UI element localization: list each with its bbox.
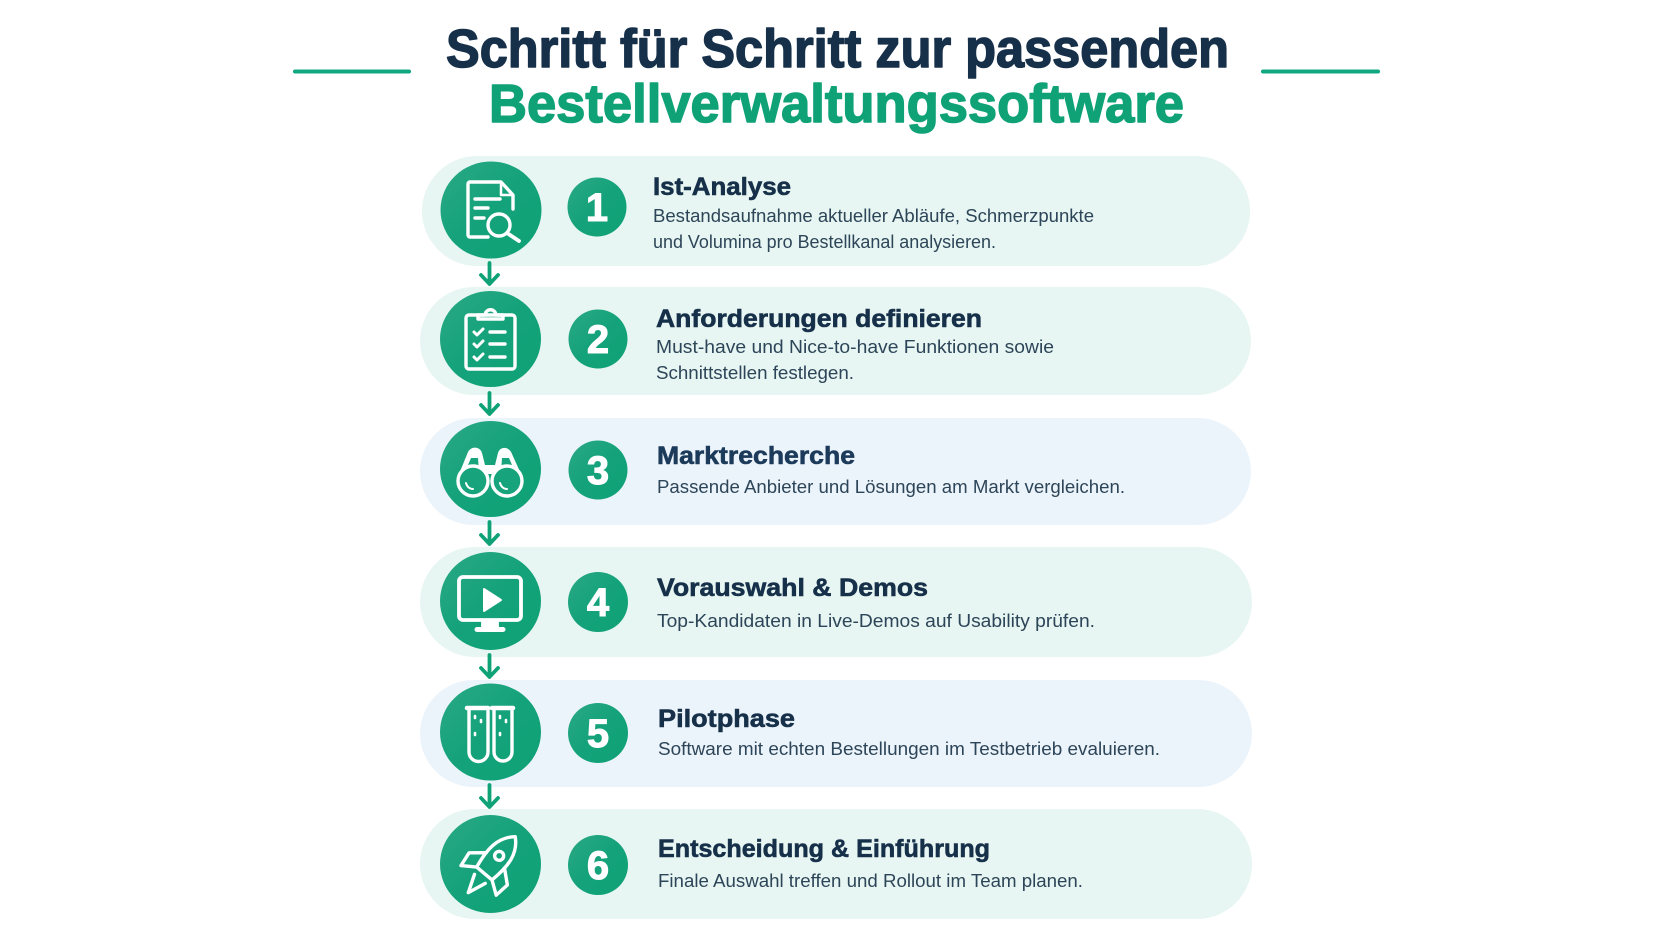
number badge 2: [568, 310, 628, 368]
step 2 description: [656, 337, 1054, 383]
step 3 description: Passende Anbieter und Lösungen am Markt vergleichen.: [657, 477, 1125, 497]
panel: step 2 background: [420, 287, 1251, 395]
step 2 heading: Anforderungen definieren: [656, 305, 982, 333]
title line 1: Schritt für Schritt zur passenden: [446, 19, 1229, 79]
step 6 description: Finale Auswahl treffen und Rollout im Team planen.: [658, 871, 1083, 891]
step 2 description: Must-have und Nice-to-have Funktionen sowie: [656, 337, 1054, 357]
panel: step 6 background: [420, 809, 1252, 919]
number badge 4: [568, 572, 628, 632]
step 5: Pilotphase: [420, 680, 1252, 787]
number badge 1: [568, 178, 626, 236]
step 5 heading: Pilotphase: [658, 705, 795, 733]
number badge 3: 3: [587, 449, 609, 493]
title: [446, 19, 1229, 134]
step 6: Entscheidung & Einführung: [420, 809, 1252, 919]
step 5 description: Software mit echten Bestellungen im Testbetrieb evaluieren.: [658, 739, 1160, 759]
step 1 description: und Volumina pro Bestellkanal analysieren.: [653, 232, 996, 252]
arrow 5 to 6: [481, 785, 498, 807]
icon: clipboard checklist: [440, 291, 541, 387]
step 1 description: Bestandsaufnahme aktueller Abläufe, Schmerzpunkte: [653, 206, 1094, 226]
arrow 3 to 4: [481, 522, 498, 544]
arrow 4 to 5: [481, 655, 498, 677]
number badge 2: 2: [587, 318, 609, 362]
icon: test tubes: [440, 684, 541, 780]
panel: step 1 background: [422, 156, 1250, 266]
number badge 6: [568, 835, 628, 895]
step 2 description: Schnittstellen festlegen.: [656, 363, 854, 383]
number badge 1: 1: [586, 186, 608, 230]
step 4 description: Top-Kandidaten in Live-Demos auf Usability prüfen.: [657, 611, 1095, 631]
icon: binoculars: [440, 421, 541, 517]
step 1: Ist-Analyse: [422, 156, 1250, 266]
title line 2: Bestellverwaltungssoftware: [489, 74, 1184, 134]
number badge 5: 5: [587, 712, 609, 756]
number badge 6: 6: [587, 844, 609, 888]
step 1 heading: Ist-Analyse: [653, 173, 791, 201]
step 1 description: [653, 206, 1094, 252]
number badge 5: [568, 703, 628, 763]
number badge 3: [568, 440, 628, 500]
panel: step 3 background: [420, 418, 1251, 525]
icon: monitor with play button: [440, 552, 541, 650]
arrow 1 to 2: [481, 263, 498, 284]
number badge 4: 4: [587, 581, 610, 625]
arrow 2 to 3: [481, 393, 498, 414]
step 4 heading: Vorauswahl & Demos: [657, 574, 928, 602]
step 4: Vorauswahl & Demos: [420, 547, 1252, 657]
step 3 heading: Marktrecherche: [657, 442, 855, 470]
panel: step 4 background: [420, 547, 1252, 657]
icon: rocket: [440, 815, 541, 913]
icon: document with magnifier: [440, 162, 542, 258]
step 6 heading: Entscheidung & Einführung: [658, 835, 990, 863]
panel: step 5 background: [420, 680, 1252, 787]
step 2: Anforderungen definieren: [420, 287, 1251, 395]
step 3: Marktrecherche: [420, 418, 1251, 525]
